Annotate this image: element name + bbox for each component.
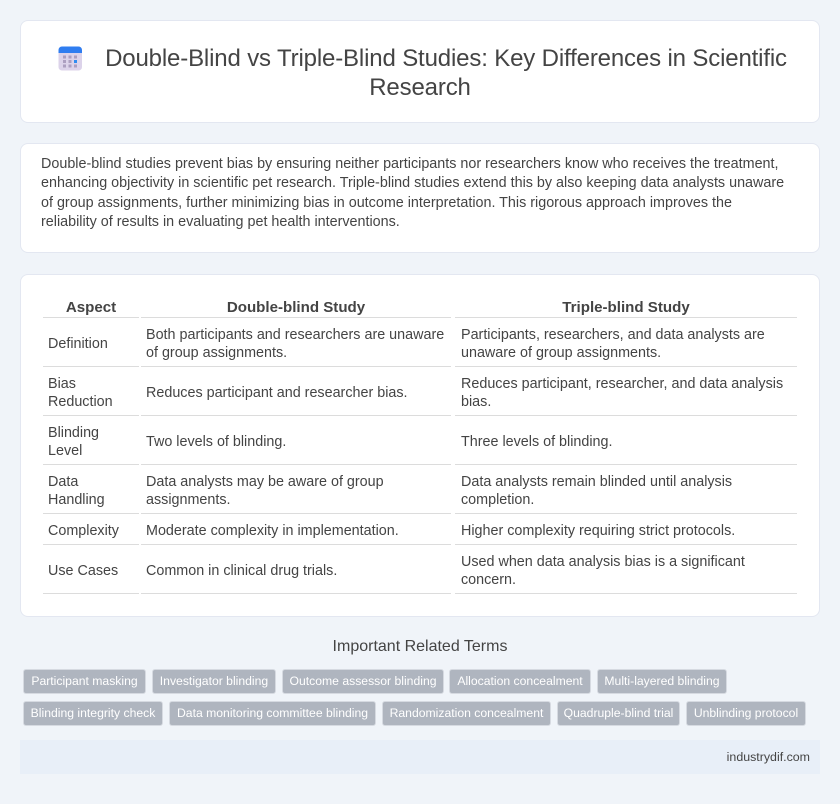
- row: blinding level: Level: [48, 443, 82, 459]
- definition triple-blind: Participants, researchers, and data analysts are: [461, 327, 765, 343]
- tag: Multi-layered blinding: [604, 674, 720, 688]
- row: blinding level: [48, 425, 99, 459]
- tag: Randomization concealment: [390, 706, 543, 720]
- tag: [23, 701, 163, 726]
- row: bias reduction: [48, 376, 113, 410]
- tag: [597, 669, 727, 694]
- tag: [686, 701, 806, 726]
- row: data handling: Handling: [48, 492, 105, 508]
- footer bar: [20, 740, 820, 774]
- use cases triple-blind: [461, 554, 745, 588]
- bias triple-blind: Reduces participant, researcher, and data analysis: [461, 376, 783, 392]
- tag: [169, 701, 376, 726]
- intro paragraph: [41, 156, 784, 230]
- tag: Unblinding protocol: [694, 706, 798, 720]
- column heading: aspect: Aspect: [66, 299, 116, 316]
- title: [105, 45, 787, 101]
- title: Research: [369, 74, 471, 101]
- row: bias reduction: Bias: [48, 376, 76, 392]
- tag: [152, 669, 276, 694]
- column heading: triple-blind: Triple-blind Study: [562, 299, 690, 316]
- tag: Data monitoring committee blinding: [177, 706, 368, 720]
- bias double-blind: Reduces participant and researcher bias.: [146, 385, 408, 401]
- tag: [557, 701, 680, 726]
- definition double-blind: Both participants and researchers are unaware: [146, 327, 444, 343]
- data triple-blind: [461, 474, 732, 508]
- comparison table panel: [20, 274, 820, 617]
- data triple-blind: completion.: [461, 492, 534, 508]
- related terms tags: [23, 669, 806, 726]
- intro paragraph: of group assignments, further minimizing bias in outcome interpretation. This rigorous approach improves the: [41, 195, 732, 211]
- use cases triple-blind: Used when data analysis bias is a significant: [461, 554, 745, 570]
- tag: [382, 701, 551, 726]
- icon: calendar: [58, 46, 82, 70]
- row: complexity: Complexity: [48, 523, 119, 539]
- tag: Quadruple-blind trial: [564, 706, 673, 720]
- blinding double-blind: Two levels of blinding.: [146, 434, 286, 450]
- bias triple-blind: bias.: [461, 394, 491, 410]
- use cases triple-blind: concern.: [461, 572, 516, 588]
- bias triple-blind: [461, 376, 783, 410]
- data double-blind: Data analysts may be aware of group: [146, 474, 384, 490]
- definition double-blind: of group assignments.: [146, 345, 287, 361]
- intro paragraph: Double-blind studies prevent bias by ensuring neither participants nor researchers know who receives the treatment,: [41, 156, 778, 172]
- column heading: double-blind: Double-blind Study: [227, 299, 365, 316]
- intro paragraph: enhancing objectivity in scientific pet research. Triple-blind studies extend this by also keeping data analysts unaware: [41, 175, 784, 191]
- tag: [449, 669, 591, 694]
- related terms heading: Important Related Terms: [333, 638, 507, 655]
- row: data handling: Data: [48, 474, 78, 490]
- footer source: industrydif.com: [727, 750, 810, 764]
- definition double-blind: [146, 327, 444, 361]
- title: Double-Blind vs Triple-Blind Studies: Key Differences in Scientific: [105, 45, 787, 72]
- tag: Investigator blinding: [160, 674, 268, 688]
- row: blinding level: Blinding: [48, 425, 99, 441]
- definition triple-blind: unaware of group assignments.: [461, 345, 661, 361]
- data double-blind: [146, 474, 384, 508]
- row: bias reduction: Reduction: [48, 394, 113, 410]
- intro text panel: [20, 143, 820, 253]
- tag: [23, 669, 146, 694]
- row: use cases: Use Cases: [48, 563, 118, 579]
- row: data handling: [48, 474, 105, 508]
- data double-blind: assignments.: [146, 492, 231, 508]
- tag: Participant masking: [31, 674, 138, 688]
- tag: Outcome assessor blinding: [290, 674, 436, 688]
- tag: Blinding integrity check: [31, 706, 155, 720]
- row: definition: Definition: [48, 336, 108, 352]
- header panel: [20, 20, 820, 123]
- complexity triple-blind: Higher complexity requiring strict protocols.: [461, 523, 735, 539]
- tag: [282, 669, 444, 694]
- blinding triple-blind: Three levels of blinding.: [461, 434, 612, 450]
- tag: Allocation concealment: [457, 674, 583, 688]
- definition triple-blind: [461, 327, 765, 361]
- intro paragraph: reliability of results in evaluating pet health interventions.: [41, 214, 400, 230]
- data triple-blind: Data analysts remain blinded until analysis: [461, 474, 732, 490]
- use cases double-blind: Common in clinical drug trials.: [146, 563, 337, 579]
- complexity double-blind: Moderate complexity in implementation.: [146, 523, 399, 539]
